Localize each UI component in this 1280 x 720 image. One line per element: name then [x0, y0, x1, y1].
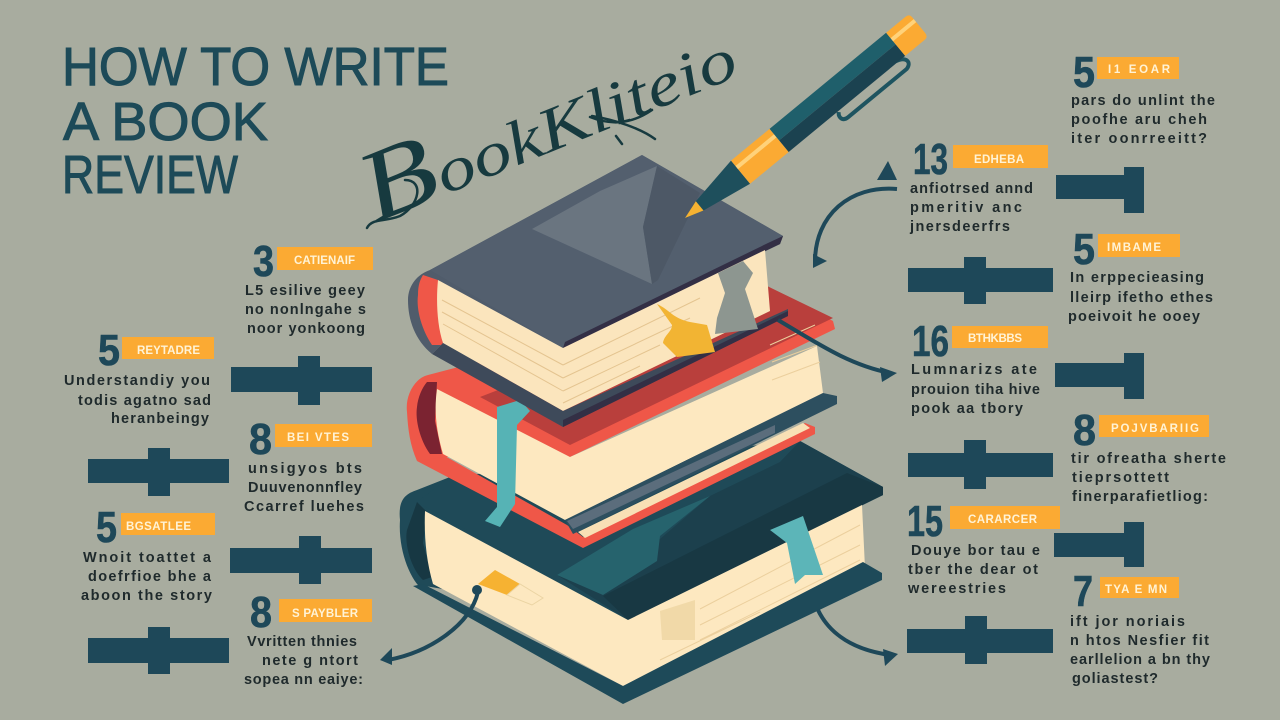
item: 5 left upper: todis agatno sad — [78, 393, 211, 409]
script logo: BookKliteio — [342, 0, 749, 243]
title: HOW TO WRITE — [62, 37, 449, 97]
pen clip — [835, 55, 911, 121]
book stack — [400, 155, 883, 704]
title — [62, 37, 449, 205]
item: 8 left lower: nete g ntort — [262, 653, 358, 669]
item: 5 right middle: IMBAME — [1107, 242, 1161, 254]
item: 13: EDHEBA — [974, 154, 1024, 166]
item: 8 left lower: S PAYBLER — [292, 608, 359, 620]
item: 5 left upper: REYTADRE — [137, 345, 200, 357]
item: 8 left upper: BEI VTES — [287, 432, 349, 444]
item: 15: Douye bor tau e — [911, 543, 1040, 559]
item: 3: CATIENAIF — [294, 255, 355, 267]
connector bars — [88, 167, 1144, 674]
pen — [675, 14, 935, 238]
item: 16: Lumnarizs ate — [911, 362, 1037, 378]
item: 16: 16 — [912, 317, 949, 366]
item: 5 right top: pars do unlint the — [1071, 93, 1215, 109]
item: 16: BTHKBBS — [968, 333, 1022, 345]
arrow: bottom book to right — [818, 610, 898, 666]
item: 5 right middle: In erppecieasing — [1070, 270, 1204, 286]
item: 3 — [245, 237, 373, 337]
red book — [407, 286, 837, 548]
item: 13 — [909, 135, 1048, 235]
item: 8 left lower: Vvritten thnies — [247, 634, 357, 650]
title: A BOOK — [63, 92, 268, 152]
title: REVIEW — [62, 145, 238, 205]
item: 13: jnersdeerfrs — [909, 219, 1010, 235]
item: 3: L5 esilive geey — [245, 283, 365, 299]
item: 7: ift jor noriais — [1070, 614, 1185, 630]
item: 5 left lower: doefrfioe bhe a — [88, 569, 212, 585]
item: 7 — [1070, 567, 1210, 687]
item: 5 right top: iter oonrreeitt? — [1071, 131, 1207, 147]
item: 5 left lower: Wnoit toattet a — [83, 550, 212, 566]
arrow: bottom book to left — [380, 585, 482, 665]
item: 8 right: finerparafietliog: — [1072, 489, 1208, 505]
item: 3: noor yonkoong — [247, 321, 365, 337]
item: 7: goliastest? — [1072, 671, 1158, 687]
icon: gold leaf — [657, 304, 715, 357]
item: 8 left upper: unsigyos bts — [248, 461, 362, 477]
item: 8 left lower: 8 — [250, 588, 272, 637]
bookmark: teal ribbon — [770, 516, 823, 584]
item: 15: tber the dear ot — [908, 562, 1038, 578]
item: 5 left lower: BGSATLEE — [126, 521, 191, 533]
item: 8 left lower — [244, 588, 372, 688]
bookmark: gold tab — [478, 570, 520, 595]
top book — [408, 155, 788, 427]
item: 5 left lower: aboon the story — [81, 588, 212, 604]
item: 5 right top — [1071, 48, 1215, 147]
item: 13: 13 — [913, 135, 948, 184]
item: 5 right middle: lleirp ifetho ethes — [1070, 290, 1213, 306]
item: 16 — [911, 317, 1048, 417]
item: 8 left upper — [244, 415, 372, 515]
board edge — [565, 393, 837, 534]
item: 3: 3 — [253, 237, 274, 286]
arrow: red book to right — [778, 320, 897, 382]
item: 5 left upper: Understandiy you — [64, 373, 210, 389]
item: 7: TYA E MN — [1105, 584, 1167, 596]
item: 15: CARARCER — [968, 514, 1038, 526]
bottom book — [400, 441, 883, 704]
item: 8 left lower: sopea nn eaiye: — [244, 672, 363, 688]
item: 16: pook aa tbory — [911, 401, 1023, 417]
item: 5 left upper — [64, 326, 214, 427]
item: 8 left upper: Ccarref luehes — [244, 499, 364, 515]
item: 8 left upper: 8 — [249, 415, 272, 464]
item: 8 right: POJVBARIIG — [1111, 423, 1199, 435]
item: 3: no nonlngahe s — [245, 302, 366, 318]
item: 5 right top: I1 EOAR — [1108, 64, 1171, 76]
item: 8 right: tir ofreatha sherte — [1071, 451, 1226, 467]
bookmark: torn gray page — [715, 261, 758, 334]
item: 8 right — [1071, 406, 1226, 505]
item: 7: earllelion a bn thy — [1070, 652, 1210, 668]
item: 5 right middle — [1068, 225, 1213, 325]
item: 5 left upper: 5 — [98, 326, 120, 375]
item: 13: anfiotrsed annd — [910, 181, 1033, 197]
item: 5 left lower: 5 — [96, 503, 117, 552]
item: 5 right middle: poeivoit he ooey — [1068, 309, 1200, 325]
bookmark: teal ribbon — [485, 400, 530, 527]
item: 8 right: 8 — [1073, 406, 1096, 455]
item: 5 right middle: 5 — [1073, 225, 1095, 274]
item: 5 left upper: heranbeingy — [111, 411, 209, 427]
item: 8 left upper: Duuvenonnfley — [248, 480, 362, 496]
item: 7: n htos Nesfier fit — [1070, 633, 1209, 649]
item: 8 right: tieprsottett — [1072, 470, 1169, 486]
script logo — [342, 0, 749, 243]
item: 15: wereestries — [907, 581, 1006, 597]
item: 7: 7 — [1073, 567, 1093, 616]
item: 16: prouion tiha hive — [911, 382, 1040, 398]
item: 5 right top: 5 — [1073, 48, 1095, 97]
arrow: curved up to item 13 — [813, 161, 897, 268]
item: 5 left lower — [81, 503, 215, 604]
item: 15: 15 — [907, 497, 943, 546]
item: 5 right top: poofhe aru cheh — [1071, 112, 1207, 128]
item: 13: pmeritiv anc — [910, 200, 1022, 216]
item: 15 — [907, 497, 1060, 597]
